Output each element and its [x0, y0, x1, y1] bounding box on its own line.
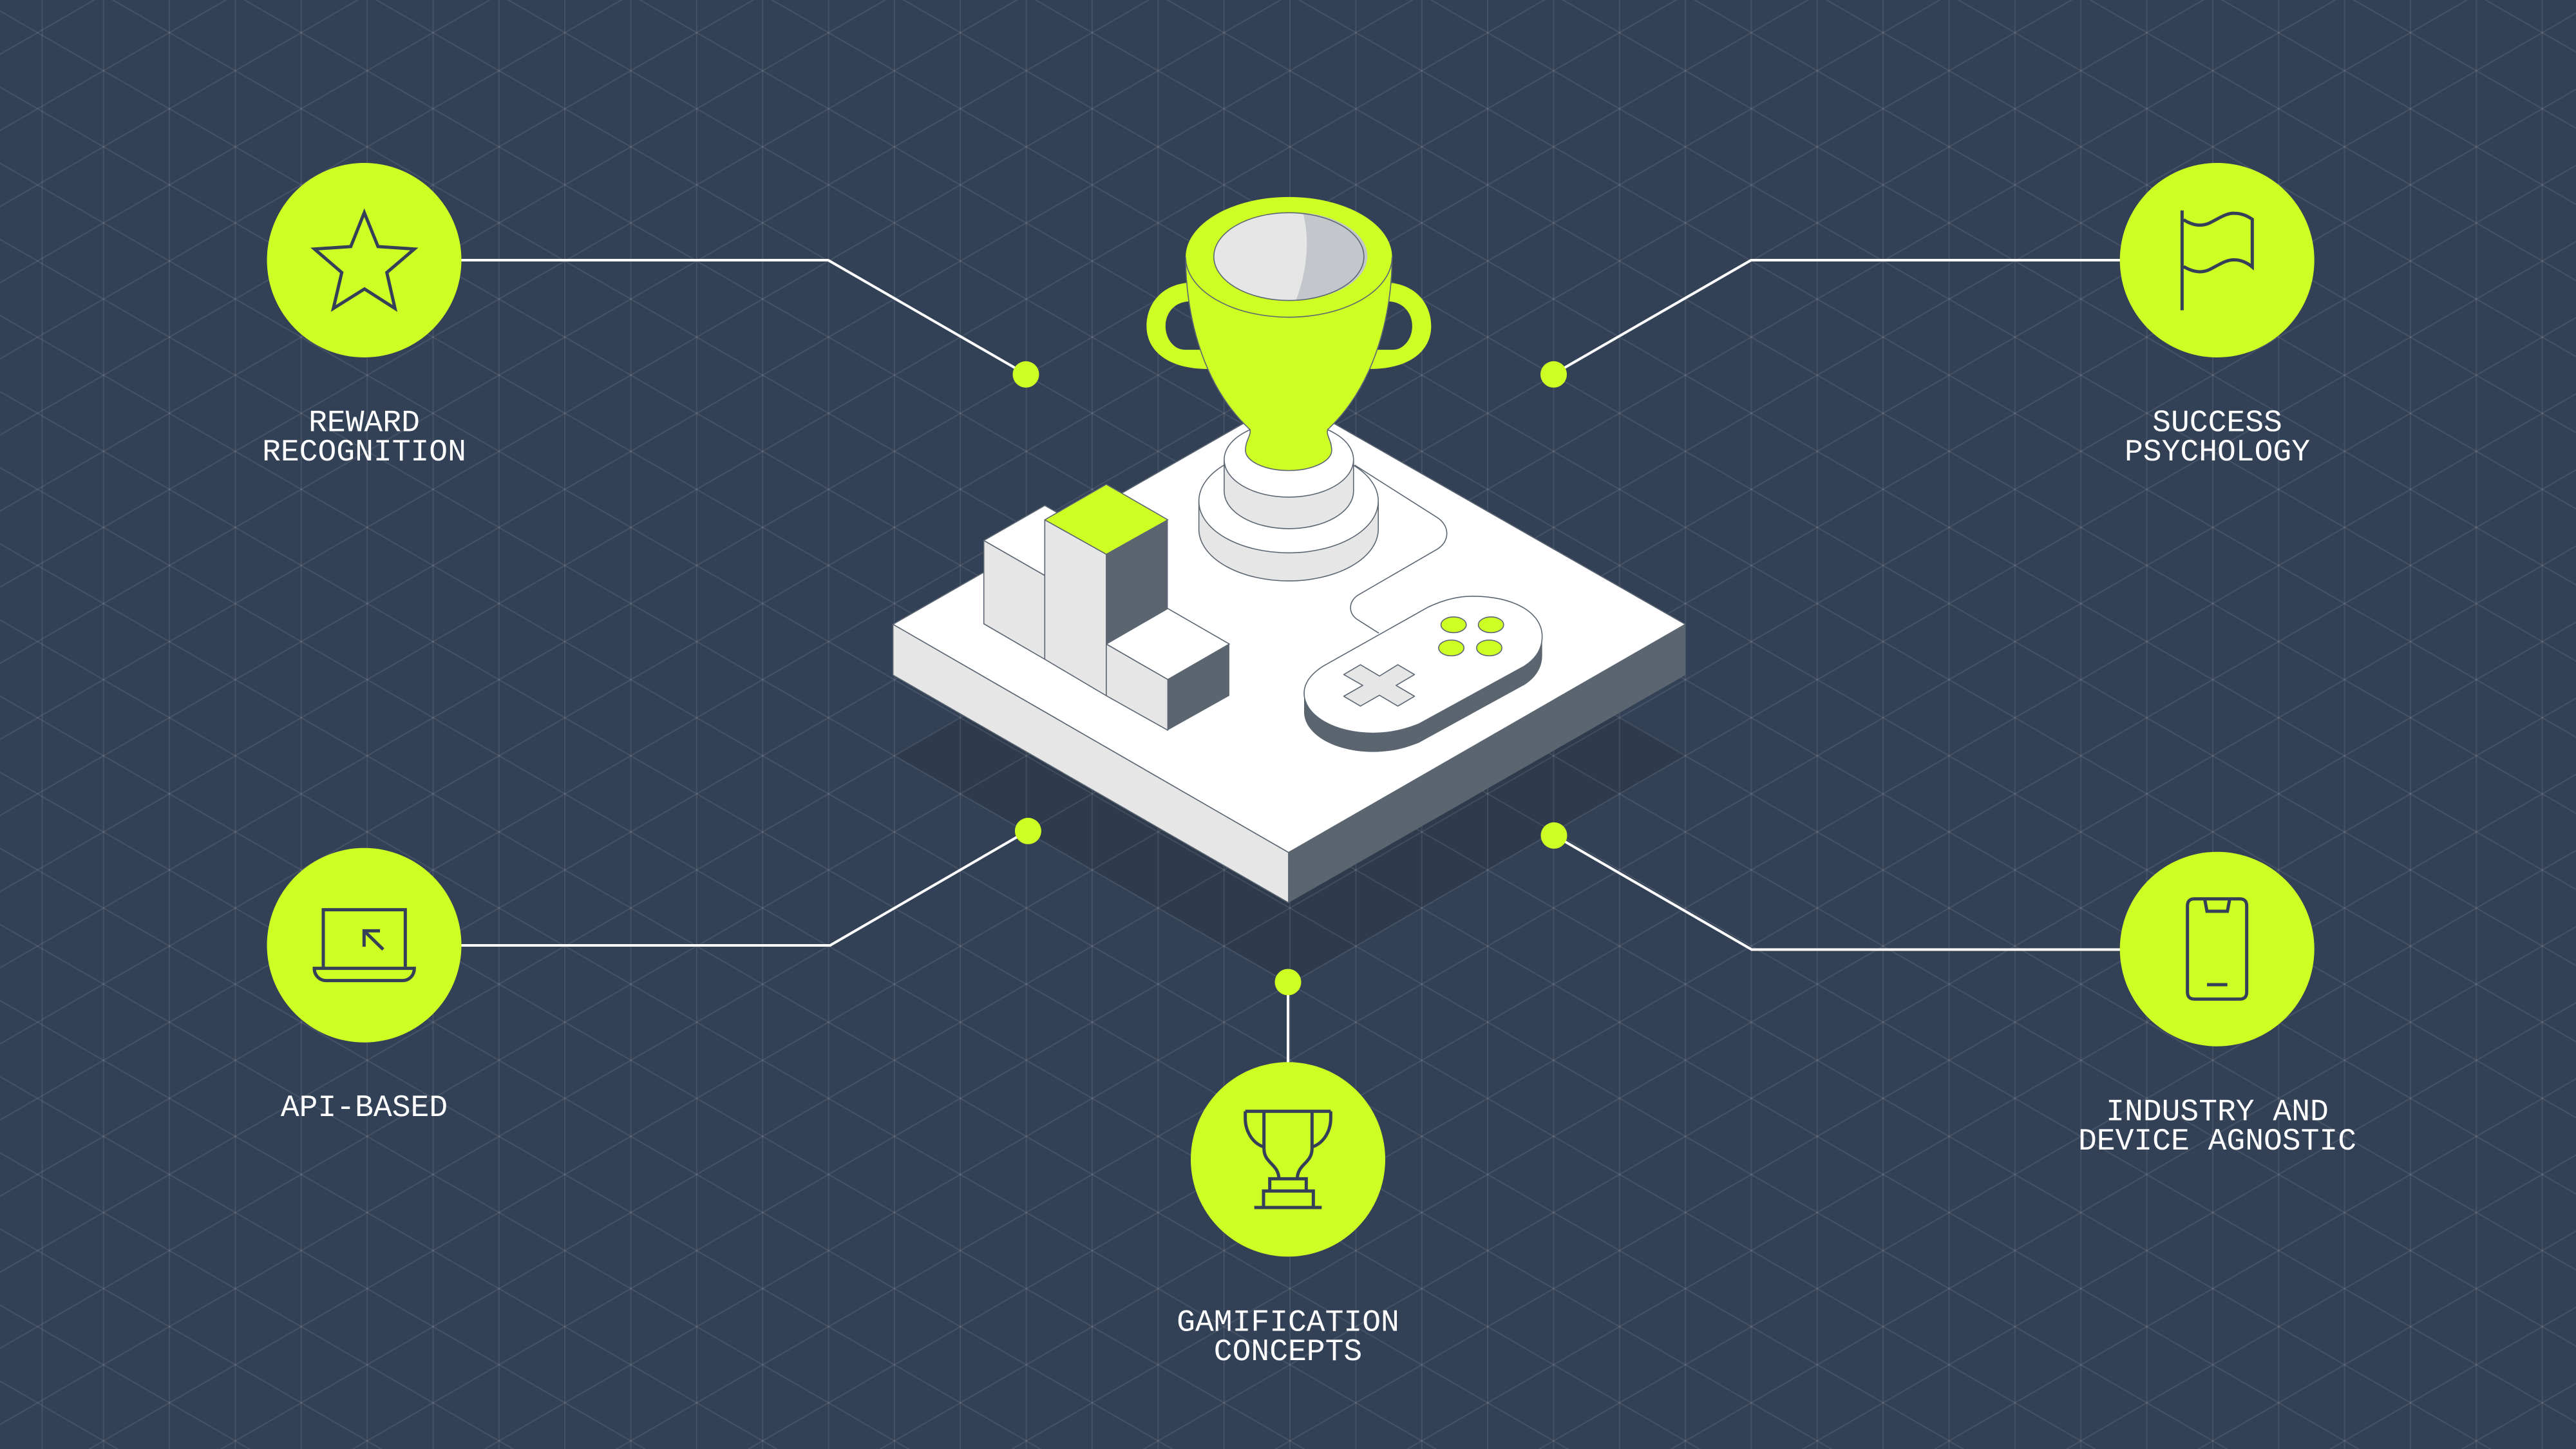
platform — [893, 397, 1685, 903]
icon: smartphone — [2188, 899, 2247, 999]
label: gamification concepts: GAMIFICATION — [1177, 1306, 1399, 1341]
trophy handles — [1146, 283, 1431, 369]
groove path from pedestal to controller — [1350, 465, 1447, 633]
icon: star — [314, 213, 414, 308]
tall block with lime top — [1045, 484, 1168, 696]
controller d-pad — [1344, 665, 1414, 706]
connector dots — [1012, 361, 1567, 996]
label: api-based: API-BASED — [281, 1091, 448, 1126]
label: gamification concepts: CONCEPTS — [1214, 1335, 1362, 1370]
icon: laptop with cursor — [314, 910, 414, 981]
pedestal upper tier — [1224, 422, 1354, 529]
node: industry and device agnostic — [2078, 852, 2356, 1159]
icon: flag — [2182, 211, 2252, 310]
central illustration: platform with trophy, blocks and controller — [893, 197, 1685, 903]
node: api-based — [267, 848, 461, 1126]
pedestal lower tier — [1199, 450, 1378, 581]
trophy cup — [1186, 197, 1392, 471]
connector: reward recognition — [461, 260, 1026, 374]
platform drop shadow — [895, 528, 1685, 983]
node: gamification concepts — [1177, 1062, 1399, 1370]
node: success psychology — [2120, 163, 2315, 470]
controller buttons — [1439, 617, 1504, 656]
label: industry and device agnostic: INDUSTRY AND — [2106, 1095, 2329, 1130]
game controller — [1304, 596, 1542, 752]
connector: industry and device agnostic — [1554, 835, 2122, 949]
label: reward recognition: RECOGNITION — [262, 435, 466, 470]
label: success psychology: PSYCHOLOGY — [2125, 435, 2310, 470]
connector: success psychology — [1553, 260, 2120, 374]
connector: api-based — [461, 831, 1028, 945]
small block — [1106, 609, 1229, 730]
label: reward recognition: REWARD — [308, 406, 420, 440]
label: success psychology: SUCCESS — [2152, 406, 2282, 440]
connector: gamification concepts — [1287, 982, 1289, 1063]
icon: trophy outline — [1245, 1112, 1331, 1208]
label: industry and device agnostic: DEVICE AGNOSTIC — [2078, 1124, 2356, 1159]
node: reward recognition — [262, 163, 466, 470]
back block — [984, 506, 1106, 659]
